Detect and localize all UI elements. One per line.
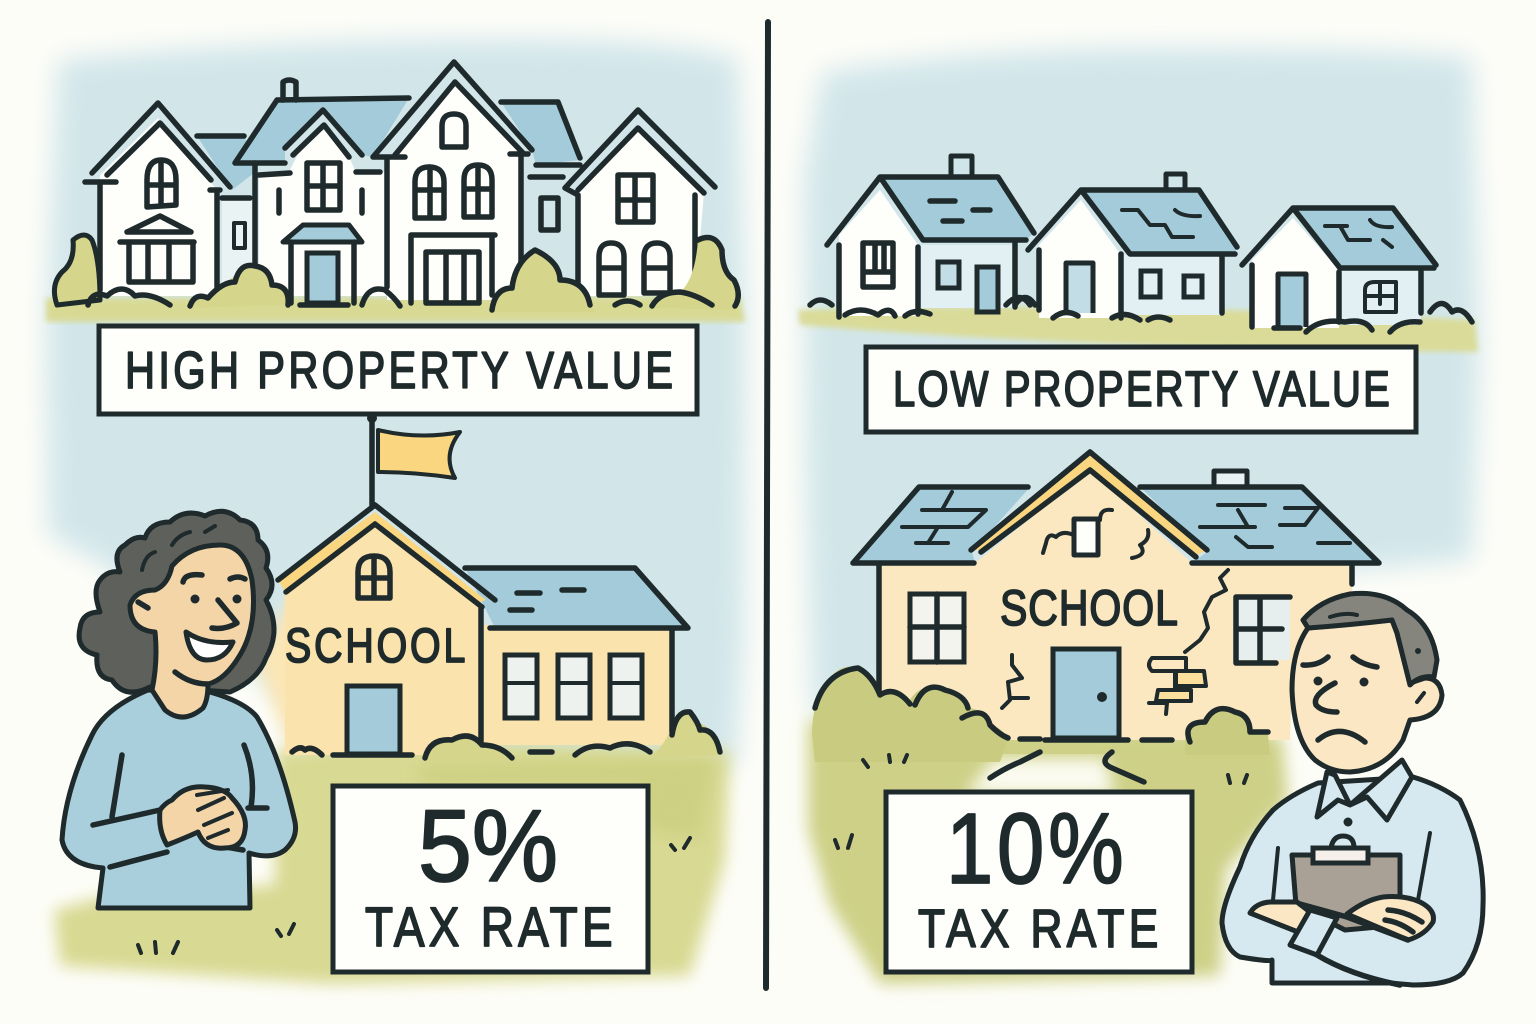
watercolor sky wash	[46, 39, 746, 775]
house 3	[387, 82, 523, 300]
illustration: run-down school: SCHOOL	[1000, 580, 1178, 636]
house 2	[259, 125, 386, 296]
sweater	[62, 690, 296, 908]
watercolor ground wash	[46, 296, 745, 984]
chimney	[283, 80, 296, 100]
bushes	[54, 235, 100, 305]
roof cracks	[902, 492, 986, 543]
illustration: run-down school	[812, 452, 1379, 848]
crossed arms	[1250, 897, 1433, 985]
house 4	[578, 128, 704, 296]
grass ticks	[138, 838, 690, 953]
callout: 10% tax rate: TAX RATE	[918, 899, 1158, 959]
hair	[79, 511, 274, 692]
label: low property value	[866, 347, 1416, 432]
shirt	[1222, 777, 1483, 985]
loose bricks	[1149, 658, 1206, 714]
collar	[1317, 760, 1412, 820]
label: high property value	[99, 326, 697, 414]
panel: low property value side	[798, 48, 1483, 985]
illustration: well kept school: SCHOOL	[285, 619, 465, 673]
house A	[880, 177, 1034, 240]
panel: high property value side	[46, 39, 746, 984]
windows	[910, 594, 964, 662]
door	[1053, 649, 1119, 738]
label: low property value: LOW PROPERTY VALUE	[893, 361, 1390, 417]
illustration: row of large houses	[54, 62, 738, 312]
callout: 5% tax rate: 5%	[418, 790, 558, 904]
house B	[1081, 190, 1237, 254]
divider line	[766, 22, 768, 988]
house C	[1293, 208, 1436, 268]
back roofs	[197, 136, 258, 190]
illustration: row of small houses	[810, 156, 1472, 332]
walls	[879, 470, 1352, 740]
facial features	[1303, 657, 1377, 742]
gable window and wall cracks	[1074, 519, 1098, 555]
callout: 10% tax rate: 10%	[946, 792, 1124, 905]
character: smiling woman	[62, 511, 296, 908]
watercolor ground wash	[798, 307, 1478, 984]
bushes and path cracks	[812, 666, 1008, 762]
callout: 5% tax rate: TAX RATE	[365, 896, 613, 958]
icon: school flag	[367, 413, 460, 505]
arms and clasped hands	[93, 745, 267, 867]
face	[1292, 620, 1442, 772]
hair	[1303, 593, 1437, 685]
house 1	[100, 118, 217, 296]
face and neck	[130, 545, 254, 717]
callout: 10% tax rate	[886, 792, 1192, 972]
character: worried man with clipboard	[1222, 593, 1483, 985]
watercolor sky wash	[804, 48, 1480, 718]
clipboard	[1273, 833, 1430, 930]
callout: 5% tax rate	[333, 786, 648, 972]
illustration: well kept school	[278, 505, 720, 760]
roofs	[853, 487, 1030, 563]
label: high property value: HIGH PROPERTY VALUE	[125, 341, 673, 399]
